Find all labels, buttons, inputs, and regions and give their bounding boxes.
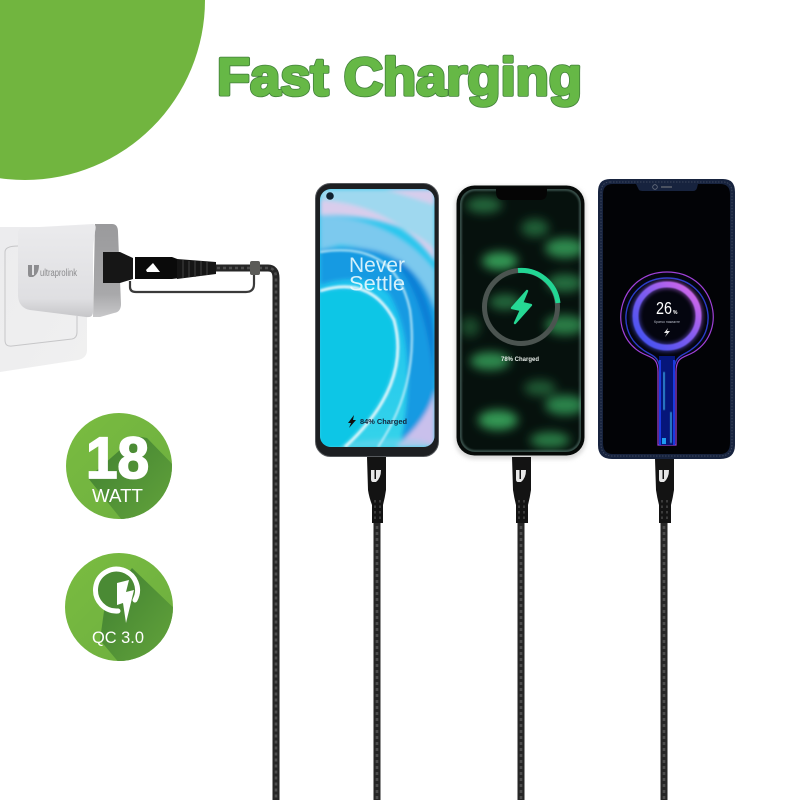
26% readout: Кратко нажмите (654, 320, 680, 324)
badge: 18 watt: WATT (92, 485, 143, 506)
charging status 78%: 78% Charged (501, 356, 539, 363)
phone 2: charging at 78% (455, 186, 586, 459)
badge: 18 watt: 18 (86, 426, 149, 491)
notch (496, 187, 547, 200)
charging status 84% (348, 415, 407, 428)
phone 2 blurred green screen (460, 189, 585, 452)
lightning bolt (512, 291, 531, 323)
charge progress ring (484, 270, 558, 344)
USB connector and cable from charger (103, 252, 276, 800)
26% readout: 26 (656, 298, 672, 318)
charger brand logo: ultraprolink (40, 268, 78, 279)
front camera and notch text (653, 185, 672, 189)
cable logo (516, 470, 526, 482)
26% readout: % (673, 310, 678, 316)
phone 1: charging at 84% (316, 184, 438, 456)
badge: QC 3.0 (65, 553, 173, 661)
phone 1 cable (367, 457, 386, 800)
decorative green circle (0, 0, 205, 180)
phone 3 cable (655, 459, 674, 800)
main braided cable (205, 268, 276, 800)
badge: QC 3.0: QC 3.0 (92, 629, 144, 647)
badge: 18 watt (66, 413, 172, 519)
title: Fast Charging (217, 48, 582, 107)
charging animation (621, 272, 713, 445)
Never Settle wallpaper text (349, 253, 405, 296)
cable logo (659, 470, 669, 482)
Never Settle wallpaper text: Never (349, 253, 405, 277)
side loop cable (130, 274, 254, 292)
front camera (326, 192, 334, 200)
wall socket plate (0, 227, 87, 372)
USB-A connector (103, 252, 133, 283)
title: Fast Charging (217, 48, 582, 107)
Never Settle wallpaper text: Settle (349, 272, 405, 296)
wall charger (18, 224, 121, 317)
charging status 84%: 84% Charged (360, 417, 407, 426)
clip on cable (250, 261, 260, 275)
adapter body (135, 257, 180, 279)
phone 1 screen wallpaper (320, 189, 435, 447)
phone 2 cable (512, 457, 531, 800)
phone 3: charging at 26% (598, 179, 735, 459)
26% readout (654, 298, 680, 337)
strain relief (177, 259, 216, 279)
cable logo (371, 470, 381, 482)
